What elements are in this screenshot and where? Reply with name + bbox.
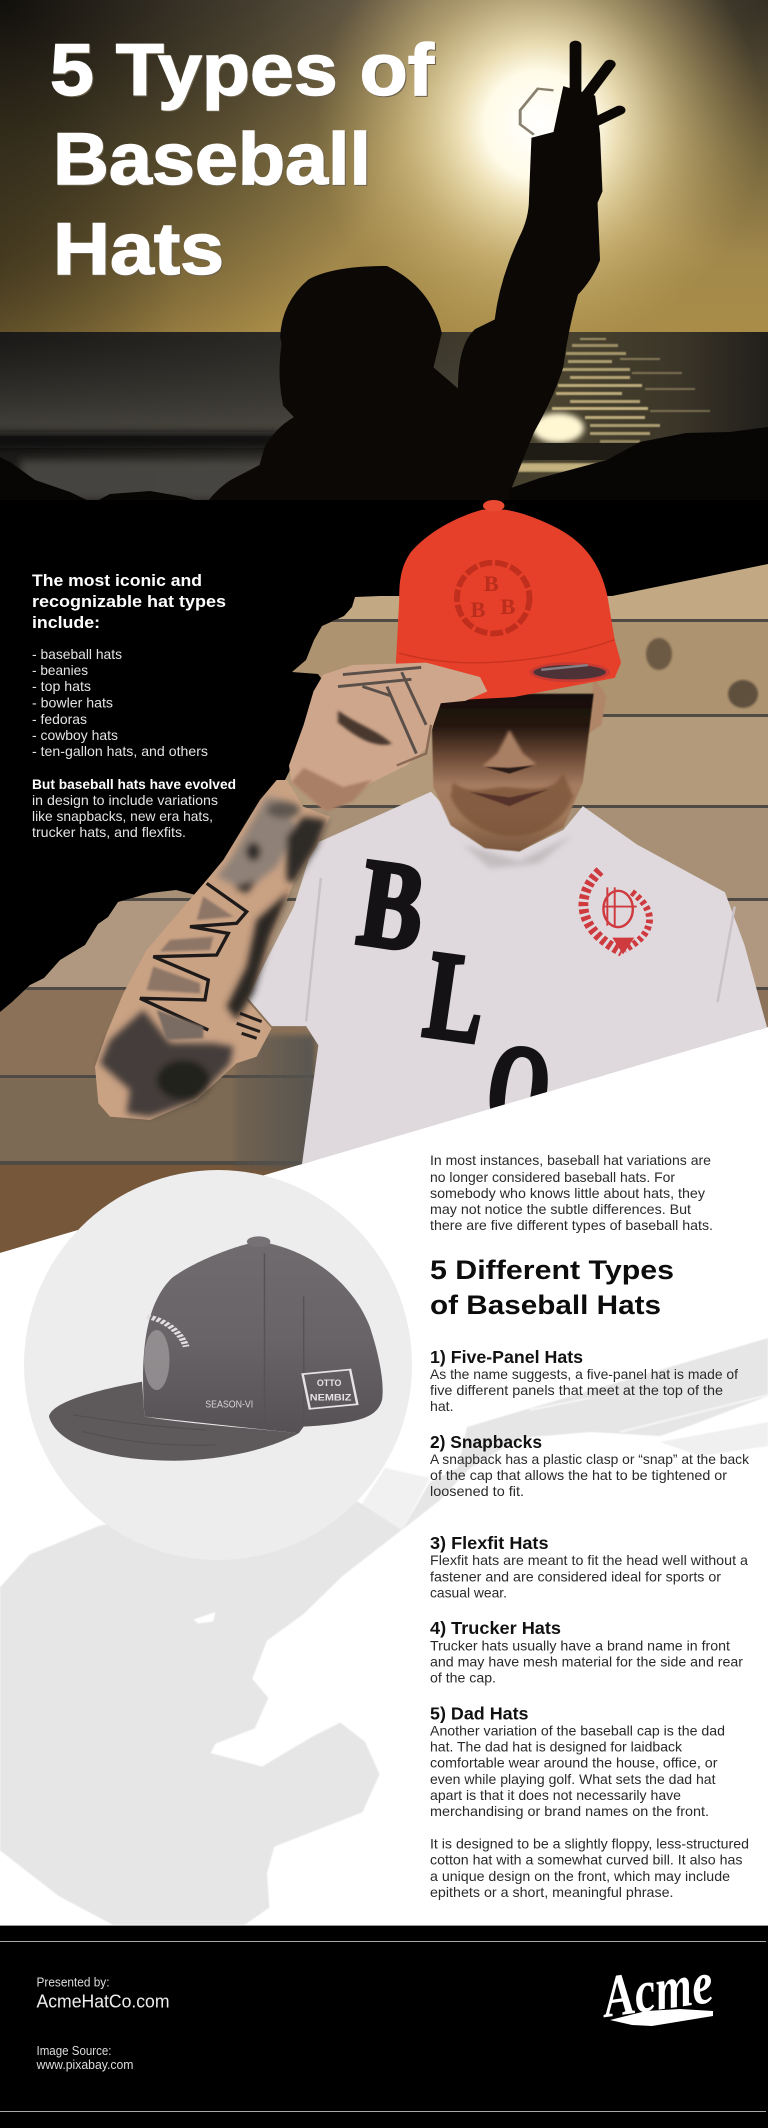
item: flexfit hats: fastener and are considered ideal for sports or [430,1568,721,1584]
face in shadow of cap brim [431,677,606,868]
red snapback cap: B [500,594,516,619]
title: Baseball [54,120,372,201]
closing paragraph: It is designed to be a slightly floppy, less-structured [430,1836,749,1852]
intro paragraph: In most instances, baseball hat variations are [430,1152,711,1168]
item: dad hats: even while playing golf. What sets the dad hat [430,1771,716,1787]
shirt letters [351,833,559,1162]
panel: footer [0,1925,768,2128]
logo: Acme: Acme [596,1949,717,2030]
item: trucker hats: 4) Trucker Hats [430,1618,561,1638]
section heading: of Baseball Hats [430,1290,661,1320]
shirt letters: O [479,1017,559,1162]
list of hat types: - bowler hats [32,694,113,710]
title [50,30,436,291]
red snapback cap: B [471,597,486,622]
shirt letters: B [351,833,433,978]
subheading: iconic hats: The most iconic and [32,571,202,590]
panel: wood plank background [0,560,768,1263]
tattooed forearm [95,780,330,1120]
sky with sun glow [0,0,768,333]
closing paragraph [430,1836,749,1900]
evolved paragraph: in design to include variations [32,792,218,808]
red crest on shirt [583,871,650,954]
evolved paragraph: But baseball hats have evolved [32,776,236,792]
item: dad hats: 5) Dad Hats [430,1704,529,1724]
charcoal flat-brim cap: SEASON-VI [205,1399,253,1410]
item: dad hats: comfortable wear around the house, office, or [430,1754,718,1770]
item: flexfit hats: casual wear. [430,1584,507,1600]
text block: iconic hat types [32,571,236,840]
intro paragraph [430,1152,713,1233]
shoreline bushes [0,427,768,520]
item: snapbacks: A snapback has a plastic clasp or “snap” at the back [430,1451,750,1467]
title: 5 Types of [51,31,436,112]
text column: five types [430,1152,750,1900]
item: trucker hats: Trucker hats usually have a brand name in front [430,1638,730,1654]
charcoal flat-brim cap: NEMBIZ [310,1393,351,1403]
title: 5 Types of [50,30,435,111]
photo: man in red cap [95,500,768,1170]
item: dad hats: Another variation of the baseball cap is the dad [430,1722,725,1738]
item: five-panel hats [430,1347,738,1414]
list of hat types: - beanies [32,662,88,678]
title: Hats [53,209,224,290]
item: flexfit hats [430,1533,748,1600]
item: trucker hats: of the cap. [430,1670,496,1686]
list of hat types: - top hats [32,678,91,694]
presented by credit: Presented by: [36,1974,110,1990]
presented by credit [36,1974,170,2012]
t-shirt [247,792,768,1170]
item: five-panel hats: five different panels that meet at the top of the [430,1382,723,1398]
item: snapbacks: 2) Snapbacks [430,1432,542,1452]
panel: white lower section [0,1027,768,1926]
charcoal flat-brim cap: OTTO [317,1378,341,1388]
item: dad hats: merchandising or brand names on the front. [430,1803,709,1819]
item: snapbacks [430,1432,750,1499]
item: trucker hats: and may have mesh material for the side and rear [430,1654,743,1670]
red snapback cap [396,500,621,701]
evolved paragraph [32,776,236,840]
section heading: 5 Different Types [430,1255,674,1285]
list of hat types: - fedoras [32,711,87,727]
title: Hats [54,210,225,291]
closing paragraph: cotton hat with a somewhat curved bill. It also has [430,1852,742,1868]
title: Baseball [53,119,371,200]
intro paragraph: there are five different types of baseball hats. [430,1217,713,1233]
list of hat types: - ten-gallon hats, and others [32,743,208,759]
item: five-panel hats: hat. [430,1398,454,1414]
sea [0,332,768,507]
charcoal flat-brim cap [49,1236,383,1461]
item: flexfit hats: 3) Flexfit Hats [430,1533,549,1553]
item: five-panel hats: As the name suggests, a five-panel hat is made of [430,1366,738,1382]
subheading: iconic hats: include: [32,613,100,632]
closing paragraph: a unique design on the front, which may include [430,1868,730,1884]
intro paragraph: no longer considered baseball hats. For [430,1169,675,1185]
evolved paragraph: trucker hats, and flexfits. [32,824,186,840]
item: flexfit hats: Flexfit hats are meant to fit the head well without a [430,1552,748,1568]
item: dad hats: hat. The dad hat is designed for laidback [430,1738,683,1754]
image source credit: Image Source: [36,2043,112,2058]
item: snapbacks: loosened to fit. [430,1483,524,1499]
hand gripping cap brim [289,663,487,812]
image source credit: www.pixabay.com [36,2057,134,2072]
item: trucker hats [430,1618,743,1686]
evolved paragraph: like snapbacks, new era hats, [32,808,213,824]
intro paragraph: may not notice the subtle differences. But [430,1201,691,1217]
panel: black torn brush shape [0,500,768,1030]
item: five-panel hats: 1) Five-Panel Hats [430,1347,583,1367]
red snapback cap: B [484,571,499,596]
item: snapbacks: of the cap that allows the hat to be tightened or [430,1467,727,1483]
subheading: iconic hats: recognizable hat types [32,592,226,611]
panel: sunset photo header [0,0,768,600]
shirt letters: L [417,925,494,1070]
item: dad hats: apart is that it does not necessarily have [430,1787,681,1803]
list of hat types: - baseball hats [32,646,122,662]
list of hat types: - cowboy hats [32,727,118,743]
image source credit [36,2043,134,2072]
gray brush stroke decoration [0,1338,768,1925]
subheading: iconic hats [32,571,226,632]
closing paragraph: epithets or a short, meaningful phrase. [430,1884,674,1900]
list of hat types [32,646,208,759]
item: dad hats [430,1704,725,1819]
intro paragraph: somebody who knows little about hats, they [430,1185,705,1201]
presented by credit: AcmeHatCo.com [36,1992,170,2012]
gray circle with cap photo [24,1170,412,1560]
silhouette of man raising hand [189,45,620,600]
section heading [430,1255,674,1320]
